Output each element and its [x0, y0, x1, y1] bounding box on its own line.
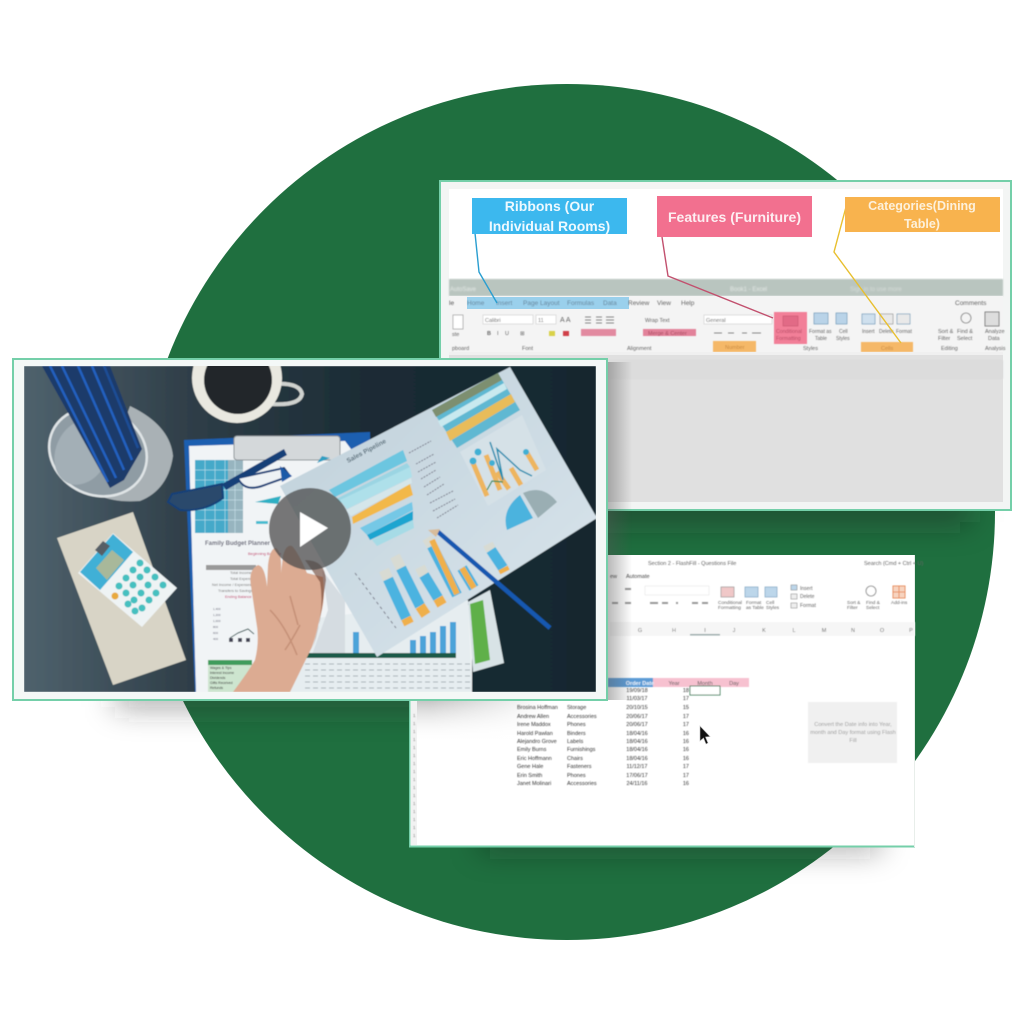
panel: Flash Fill worksheet screenshot [409, 555, 923, 848]
ribbon controls: Cells [881, 346, 893, 352]
ribbon controls: Find & [957, 329, 973, 335]
budget green table [208, 660, 252, 665]
ribbon icons [814, 313, 828, 324]
pencil holder [47, 406, 174, 502]
highlight: alignment strip [581, 329, 616, 336]
worksheet toolbar: Sort & [847, 600, 861, 606]
column headers: I [704, 628, 706, 634]
data table: 16 [683, 781, 689, 787]
video photo: desk with charts [24, 333, 597, 692]
data table: Order Date [626, 681, 654, 687]
data table: Labels [567, 739, 583, 745]
highlight: merge and center [643, 329, 696, 336]
ribbon controls: Cell [839, 329, 848, 335]
blue pencils [42, 366, 142, 488]
data table: Janet Molinari [517, 781, 551, 787]
worksheet toolbar: ew [610, 574, 617, 580]
highlight: ribbon tabs [467, 297, 629, 309]
callout: Categories: Table) [904, 217, 940, 231]
ribbon controls: Delete [879, 329, 894, 335]
ribbon controls [452, 312, 1006, 352]
ribbon controls: Insert [862, 329, 875, 335]
clipboard with budget planner: Ending Balance [225, 595, 252, 599]
row numbers: 1 [413, 713, 416, 718]
data table: Gene Hale [517, 764, 543, 770]
data table: 15 [683, 705, 689, 711]
data table: 16 [683, 756, 689, 762]
ribbon controls: B [487, 331, 491, 337]
clipboard with budget planner: Net Income / Expenses [212, 583, 251, 587]
ribbon controls: Table [815, 336, 827, 342]
callout: Ribbons: Ribbons (Our [505, 198, 595, 214]
ribbon controls: Styles [803, 346, 818, 352]
note box [808, 702, 897, 763]
data table: 18/04/16 [626, 731, 648, 737]
data table [517, 678, 749, 787]
ribbon controls: ⊞ [520, 331, 525, 337]
selected cell [690, 686, 720, 695]
ribbon tabs: Data [603, 300, 617, 307]
clipboard with budget planner: Transfers to Savings [218, 589, 253, 593]
budget mini chart: 400 [213, 637, 218, 641]
ribbon controls: I [497, 331, 499, 337]
column headers: M [822, 628, 827, 634]
panel: video thumbnail [13, 333, 607, 700]
formula and grid area [449, 352, 1003, 356]
ribbon controls: U [505, 331, 509, 337]
row numbers: 1 [413, 753, 416, 758]
note box: month and Day format using Flash [810, 730, 896, 736]
budget mini chart: 1,400 [213, 607, 221, 611]
teal mini chart [255, 496, 281, 504]
clipboard with budget planner: Total Expenses [230, 577, 256, 581]
data table: Binders [567, 731, 586, 737]
green background circle [139, 84, 995, 940]
data table: Emily Burns [517, 747, 547, 753]
lower report sheet [285, 570, 504, 692]
highlight: cells label [861, 342, 913, 352]
table header [608, 678, 653, 687]
ribbon tabs [449, 300, 987, 307]
worksheet toolbar: Insert [800, 586, 813, 592]
row numbers [413, 713, 416, 838]
data table: Irene Maddox [517, 722, 551, 728]
data table: Brosina Hoffman [517, 705, 558, 711]
ribbon controls: Alignment [627, 346, 652, 352]
ribbon controls: pboard [452, 346, 469, 352]
data table: Year [668, 681, 680, 687]
row numbers: 1 [413, 777, 416, 782]
data table: Phones [567, 773, 586, 779]
row numbers: 1 [413, 833, 416, 838]
worksheet toolbar: Cell [766, 600, 774, 606]
column headers: L [792, 628, 796, 634]
data table: 17 [683, 764, 689, 770]
data table: Day [729, 681, 739, 687]
column headers: K [762, 628, 766, 634]
pencil on paper [428, 529, 550, 628]
data table: 11/03/17 [626, 696, 648, 702]
funnel labels [409, 441, 458, 518]
ribbon controls: Styles [836, 336, 850, 342]
worksheet toolbar: Section 2 - FlashFill - Questions File [648, 561, 736, 567]
ribbon tabs: Insert [496, 300, 512, 307]
budget mini chart: 600 [213, 631, 218, 635]
ribbon tabs: Formulas [567, 300, 595, 307]
pie chart [506, 490, 557, 530]
data table: 18/04/16 [626, 747, 648, 753]
row numbers: 1 [413, 809, 416, 814]
shadow: screenshot panels on background [115, 495, 970, 850]
coffee cup [191, 366, 305, 424]
sales pipeline report sheet [280, 367, 597, 657]
worksheet toolbar: Filter [847, 605, 858, 611]
data table: 17 [683, 696, 689, 702]
data table: 20/06/17 [626, 722, 648, 728]
connector: features [662, 237, 773, 318]
ribbon tabs: Review [628, 300, 650, 307]
row numbers: 1 [413, 737, 416, 742]
data table: Fasteners [567, 764, 592, 770]
ribbon controls: Number [725, 345, 745, 351]
data table: 16 [683, 731, 689, 737]
ribbon controls: 11 [538, 318, 544, 324]
budget mini chart [213, 607, 221, 641]
row numbers: 1 [413, 817, 416, 822]
worksheet toolbar: as Table [746, 605, 764, 611]
column headers: G [638, 628, 642, 634]
ribbon controls: Sort & [938, 329, 954, 335]
ribbon controls: Format as [809, 329, 832, 335]
bar chart [384, 538, 505, 624]
notebook [57, 512, 186, 685]
worksheet toolbar: General [650, 588, 670, 594]
play button [269, 488, 351, 570]
ribbon controls: Data [988, 336, 1001, 342]
worksheet toolbar: Add-ins [891, 600, 908, 606]
ribbon controls: Analysis [985, 346, 1006, 352]
ribbon tabs: Page Layout [523, 300, 560, 307]
column headers: N [851, 628, 855, 634]
shadow: video panel cast to the right [606, 362, 632, 700]
ribbon controls: Select [957, 336, 973, 342]
clipboard with budget planner: Refunds [210, 686, 223, 690]
clipboard with budget planner: Dividends [210, 676, 226, 680]
top color table [432, 373, 520, 448]
data table: 18/04/16 [626, 739, 648, 745]
data table: 19/09/18 [626, 688, 648, 694]
budget table [195, 460, 228, 533]
worksheet toolbar: Format [800, 603, 816, 609]
data table: Accessories [567, 714, 597, 720]
data table: 18/04/16 [626, 756, 648, 762]
row numbers: 1 [413, 785, 416, 790]
ribbon controls: Font [522, 346, 533, 352]
row numbers: 1 [413, 729, 416, 734]
ribbon controls: Conditional [776, 329, 802, 335]
data table: 17 [683, 773, 689, 779]
callout: Ribbons: Individual Rooms) [489, 218, 610, 234]
ribbon controls: Analyze [985, 329, 1005, 335]
worksheet toolbar: Search (Cmd + Ctrl + U) [864, 561, 923, 567]
clipboard with budget planner: Wages & Tips [210, 666, 232, 670]
data table: Andrew Allen [517, 714, 549, 720]
clipboard with budget planner: Gifts Received [210, 681, 233, 685]
worksheet toolbar: Conditional [718, 600, 742, 606]
data table: 17 [683, 714, 689, 720]
connector: categories [834, 207, 901, 343]
column headers: H [672, 628, 676, 634]
column headers: O [880, 628, 885, 634]
clipboard with budget planner: Interest Income [210, 671, 234, 675]
worksheet toolbar: Styles [766, 605, 780, 611]
row numbers: 1 [413, 801, 416, 806]
mixed bar-line chart [461, 416, 540, 498]
icon: mouse cursor [700, 726, 710, 744]
budget mini chart: 1,200 [213, 613, 221, 617]
bar axis labels [355, 573, 396, 628]
note box: Fill [849, 738, 857, 744]
ribbon controls: Formatting [776, 336, 801, 342]
budget mini chart: 1,000 [213, 619, 221, 623]
ribbon controls: Editing [941, 346, 958, 352]
title bar: Book1 - Excel [730, 287, 767, 293]
ribbon tabs: le [449, 300, 454, 307]
data table: 17/06/17 [626, 773, 648, 779]
column headers: P [909, 628, 913, 634]
budget mini chart: 800 [213, 625, 218, 629]
ribbon controls: Wrap Text [645, 318, 670, 324]
sales pipeline report sheet: Sales Pipeline [346, 438, 388, 465]
callout: Features: Features (Furniture) [668, 209, 801, 225]
worksheet toolbar: Select [866, 605, 880, 611]
connector: ribbons [475, 233, 497, 303]
glasses [168, 449, 292, 510]
worksheet toolbar: Automate [626, 574, 650, 580]
title bar: AutoSave [450, 287, 477, 293]
row numbers: 1 [413, 825, 416, 830]
ribbon controls: General [706, 318, 726, 324]
ribbon tabs: View [657, 300, 671, 307]
data table: Alejandro Grove [517, 739, 557, 745]
row number column [411, 700, 417, 845]
budget title: Family Budget Planner [205, 541, 271, 547]
note box: Convert the Date info into Year, [814, 722, 892, 728]
ribbon controls: ste [452, 332, 459, 338]
data table: 24/11/16 [626, 781, 648, 787]
clipboard with budget planner: Beginning Balance [248, 551, 282, 556]
data table: Chairs [567, 756, 583, 762]
data table: Month [697, 681, 713, 687]
data table: 20/10/15 [626, 705, 648, 711]
calculator [78, 533, 177, 627]
data table: Phones [567, 722, 586, 728]
ribbon tabs: Home [467, 300, 485, 307]
row numbers: 1 [413, 793, 416, 798]
ribbon controls: Filter [938, 336, 950, 342]
callout: Categories: Categories(Dining [868, 199, 976, 213]
data table: 18 [683, 688, 689, 694]
data table: Storage [567, 705, 586, 711]
data table: 11/12/17 [626, 764, 648, 770]
panel: Excel ribbon screenshot [440, 181, 1011, 510]
callout: Features [657, 196, 812, 237]
row numbers: 1 [413, 761, 416, 766]
data table: 16 [683, 747, 689, 753]
highlight: number label [713, 341, 756, 352]
data table: 16 [683, 739, 689, 745]
funnel chart [329, 450, 414, 546]
hand [233, 546, 324, 692]
row numbers: 1 [413, 769, 416, 774]
data table: Accessories [567, 781, 597, 787]
worksheet toolbar: Format [746, 600, 762, 606]
callout: Ribbons [472, 198, 627, 234]
ribbon controls: Format [896, 329, 912, 335]
worksheet toolbar: Formatting [718, 605, 741, 611]
clipboard with budget planner [168, 432, 472, 692]
column headers: J [733, 628, 736, 634]
worksheet toolbar: Delete [800, 594, 815, 600]
ribbon controls: Calibri [485, 318, 501, 324]
worksheet toolbar [610, 561, 923, 611]
ribbon controls: A A [560, 317, 571, 324]
data table: 17 [683, 722, 689, 728]
highlight: conditional formatting [774, 312, 807, 344]
title bar [449, 279, 1003, 296]
shadow from video panel [417, 700, 547, 742]
ribbon tabs: Help [681, 300, 695, 307]
data table: Erin Smith [517, 773, 542, 779]
ribbon area [449, 296, 1003, 352]
data table: Eric Hoffmann [517, 756, 552, 762]
clipboard with budget planner: Total Income [230, 571, 252, 575]
row numbers: 1 [413, 721, 416, 726]
row numbers: 1 [413, 745, 416, 750]
data table: Harold Pawlan [517, 731, 553, 737]
ribbon controls: Merge & Center [648, 331, 687, 337]
column headers [610, 622, 915, 636]
ribbon tabs: Comments [955, 300, 987, 307]
worksheet toolbar: Find & [866, 600, 881, 606]
data table: 20/06/17 [626, 714, 648, 720]
callout: Categories [845, 197, 1000, 232]
data table: Furnishings [567, 747, 596, 753]
title bar: Sign in to use more [850, 287, 902, 293]
